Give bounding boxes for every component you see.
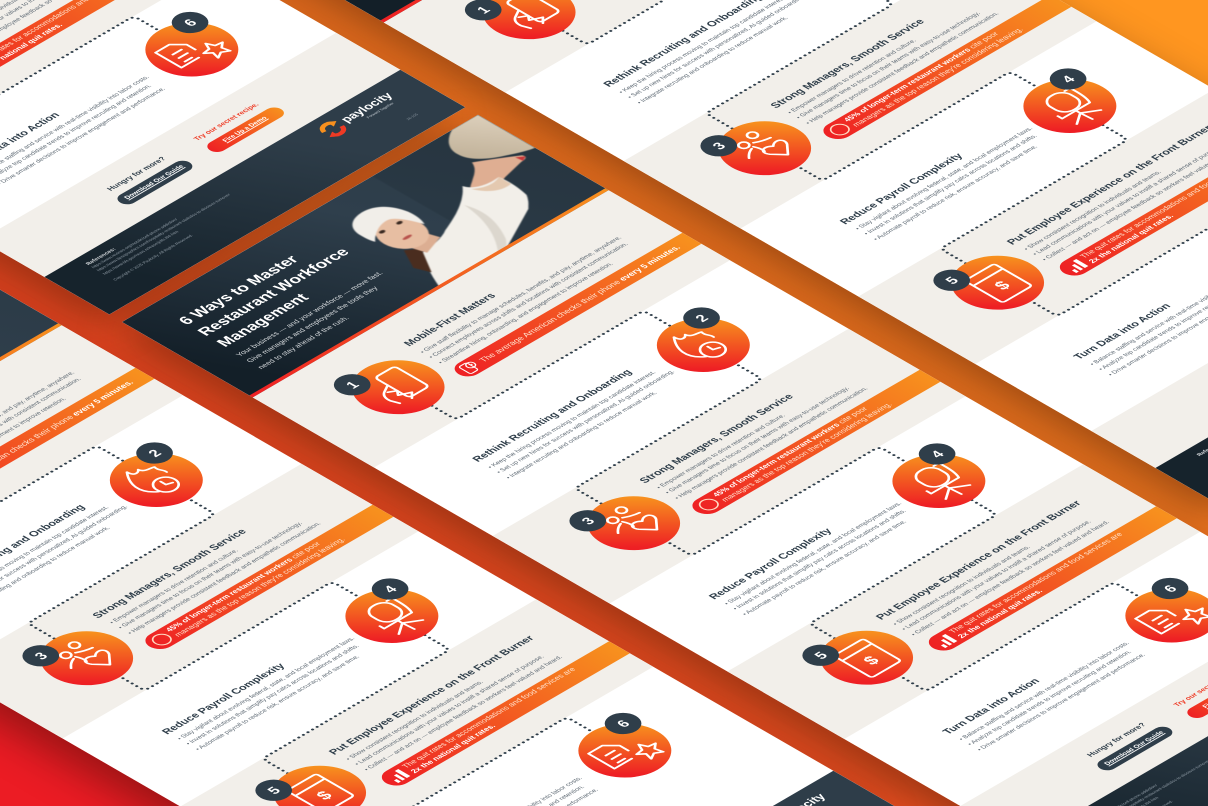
bullets: • Lead communications with your values to instill a shared sense of purpose. <box>354 655 546 767</box>
references: Copyright © 2025 Paylocity. All Rights Reserved. <box>112 233 194 281</box>
footer <box>1024 636 1208 806</box>
references: https://www.reviews.org/mobile/cell-phone-addiction/ <box>90 218 179 269</box>
badge node 4 <box>873 443 1005 519</box>
callout <box>0 358 172 515</box>
heading: Mobile-First Matters <box>401 291 499 348</box>
section 5 <box>858 89 1208 364</box>
bullets: • Empower managers to drive retention and culture. <box>655 413 787 490</box>
heading: Reduce Payroll Complexity <box>706 527 835 601</box>
callout <box>0 0 214 88</box>
badge node 4: 4 <box>1058 73 1078 85</box>
bullets: • Empower managers to drive retention and culture. <box>786 38 918 115</box>
logo <box>320 121 346 138</box>
bullets: • Give managers time to focus on their teams with easy-to-use technology. <box>795 11 983 120</box>
tagline: Forward Together <box>366 102 395 119</box>
badge node 5: 5 <box>810 649 831 661</box>
bullets: • Stay vigilant about evolving federal, state, and local employment laws. <box>176 636 356 741</box>
badge node 3 <box>21 620 152 696</box>
badge node 2: 2 <box>691 312 712 324</box>
heading: Strong Managers, Smooth Service <box>90 527 249 620</box>
badge node 6: 6 <box>180 17 200 28</box>
callout: 2x the national quit rates. <box>1087 213 1176 265</box>
bullets: • Give staff flexibility to manage schedules, benefits, and pay, anytime, anywhere. <box>418 235 623 354</box>
bullets: • Invest in solutions that simplify pay calcs across locations and shifts. <box>863 134 1039 236</box>
callout <box>817 0 1089 143</box>
badge node 5: 5 <box>263 784 284 796</box>
bullets: • Invest in solutions that simplify pay calcs across locations and shifts. <box>185 644 361 746</box>
prompt: Try our secret recipe. <box>192 102 261 142</box>
badge node 5: $ <box>312 788 337 803</box>
bullets: • Analyze top candidate trends to improve recruiting and retention. <box>966 650 1134 747</box>
bullets: • Set up new hires for success with personalized, AI-guided onboarding. <box>495 369 677 475</box>
badge node 3 <box>699 110 830 186</box>
callout: 45% of longer-term restaurant workers cite poor <box>841 30 1000 123</box>
heading: Turn Data into Action <box>940 677 1043 736</box>
bullets: • Help managers provide consistent feedback and empathetic communication. <box>804 11 1001 126</box>
badge node 6 <box>1106 577 1208 654</box>
badge node 1: 1 <box>473 4 494 16</box>
section 6 <box>940 578 1208 752</box>
bullets: • Automate payroll to reduce risk, ensure accuracy, and save time. <box>741 519 909 617</box>
bullets: • Connect employees across shifts and locations with consistent communication. <box>428 242 630 360</box>
section 3 <box>493 329 966 604</box>
bullets: • Invest in solutions that simplify pay calcs across locations and shifts. <box>732 509 908 611</box>
callout <box>923 496 1194 654</box>
intro text: Your business — and your workforce — move fast. <box>234 270 385 358</box>
references: References: <box>85 247 118 266</box>
bullets: • Show consistent recognition to individuals and teams. <box>891 545 1032 626</box>
callout: managers as the top reason they're considering leaving. <box>172 536 347 638</box>
bullets: • Integrate recruiting and onboarding to reduce manual work. <box>505 390 659 480</box>
bullets: • Collect — and act on — employee feedback so workers feel valued and heard. <box>363 655 564 772</box>
bullets: • Stay vigilant about evolving federal, state, and local employment laws. <box>854 126 1034 231</box>
bullets: • Drive smarter decisions to improve engagement and performance. <box>976 652 1147 752</box>
button: guide <box>1093 724 1176 773</box>
title: Management <box>213 291 313 349</box>
bullets: • Integrate recruiting and onboarding to reduce manual work. <box>636 15 790 105</box>
button: guide: Download Our Guide <box>123 164 186 201</box>
callout: managers as the top reason they're considering leaving. <box>850 26 1025 128</box>
prompt: Hungry for more? <box>1085 721 1148 758</box>
heading: Reduce Payroll Complexity <box>159 662 288 736</box>
heading: Strong Managers, Smooth Service <box>637 392 796 485</box>
heading: Put Employee Experience on the Front Burner <box>326 634 537 757</box>
badge node 3: 3 <box>708 140 729 152</box>
callout: The quit rates for accommodations and food services are <box>947 531 1124 634</box>
badge node 5 <box>801 620 932 696</box>
section 5 <box>180 599 653 806</box>
section 5 <box>727 464 1200 739</box>
badge node 5: $ <box>990 278 1015 293</box>
bullets: • Help managers provide consistent feedback and empathetic communication. <box>673 386 870 501</box>
badge node 4: 4 <box>927 448 947 460</box>
sheet: centre copy <box>122 115 1208 806</box>
bullets: • Empower managers to drive retention and culture. <box>108 548 240 625</box>
button: demo <box>203 105 288 154</box>
header band <box>122 115 609 397</box>
callout: The quit rates for accommodations and food services are <box>400 666 577 769</box>
bullets: • Automate payroll to reduce risk, ensure accuracy, and save time. <box>872 144 1040 242</box>
sheet: left copy <box>0 250 898 806</box>
badge node 5 <box>932 245 1063 321</box>
footer <box>477 771 898 806</box>
references: https://www.bls.gov/news.release/jolts.t04.htm <box>101 230 179 275</box>
footer <box>1155 261 1208 506</box>
badge node 3: 3 <box>30 650 51 662</box>
accent strip <box>380 0 740 22</box>
bullets: • Give managers time to focus on their teams with easy-to-use technology. <box>664 386 852 495</box>
callout: The average American checks their phone every 5 minutes. <box>476 243 682 363</box>
section 4 <box>837 68 1116 242</box>
badge node 2: 2 <box>144 447 165 459</box>
header band <box>253 0 740 22</box>
callout <box>376 631 647 789</box>
button: demo <box>1183 671 1208 720</box>
bullets: • Show consistent recognition to individuals and teams. <box>1022 170 1163 251</box>
dotted connector <box>430 312 1138 691</box>
section 2 <box>470 307 750 480</box>
badge node 2 <box>769 0 900 8</box>
callout <box>1054 121 1208 279</box>
section 1 <box>384 0 861 92</box>
badge node 3: 3 <box>577 515 598 527</box>
badge node 4: 4 <box>380 583 400 595</box>
call to action <box>960 599 1208 806</box>
button: guide: Download Our Guide <box>1103 730 1166 767</box>
intro text: Give managers and employees the tools they <box>244 285 380 364</box>
title: 6 Ways to Master <box>175 253 302 327</box>
references: https://www.tipsographics.com/hospitality-restaurant-statistics-to-discover-turnover <box>96 193 232 272</box>
accent strip <box>0 323 62 532</box>
bullets: • Show consistent recognition to individuals and teams. <box>344 680 485 761</box>
dotted connector <box>0 446 592 806</box>
callout <box>449 223 719 380</box>
bullets: • Stay vigilant about evolving federal, state, and local employment laws. <box>723 501 903 606</box>
callout: 45% of longer-term restaurant workers cite poor <box>163 540 322 633</box>
section 5 <box>0 0 220 173</box>
footer <box>44 70 465 314</box>
badge node 6 <box>559 712 691 789</box>
call to action <box>0 33 400 277</box>
section 4 <box>706 443 986 617</box>
section 6 <box>410 712 672 806</box>
section 4 <box>159 578 438 752</box>
accent strip <box>249 188 609 398</box>
bullets: • Give managers time to focus on their teams with easy-to-use technology. <box>117 521 305 630</box>
badge node 6: 6 <box>1160 583 1180 594</box>
section 1 <box>0 325 183 602</box>
badge node 1 <box>332 349 464 425</box>
bullets: • Help managers provide consistent feedback and empathetic communication. <box>126 521 323 636</box>
call to action <box>1091 224 1208 468</box>
section 2 <box>0 442 203 615</box>
wordmark: paylocity <box>337 90 396 125</box>
heading: Strong Managers, Smooth Service <box>768 17 927 110</box>
section 3 <box>624 0 1097 228</box>
badge node 1: 1 <box>342 379 363 391</box>
callout: managers as the top reason they're considering leaving. <box>719 401 894 503</box>
intro text: need to stay ahead of the rush. <box>255 315 351 370</box>
callout <box>686 360 958 518</box>
bullets: • Automate payroll to reduce risk, ensure accuracy, and save time. <box>194 654 362 752</box>
badge node 5: $ <box>859 653 884 668</box>
sheet: upper-left copy, lower half <box>0 0 465 314</box>
section 6 <box>1071 266 1208 377</box>
heading: Reduce Payroll Complexity <box>837 152 966 226</box>
button: demo: Fire Up a Demo <box>221 116 269 143</box>
bullets: • Drive smarter decisions to improve engagement and performance. <box>0 86 167 186</box>
section 6 <box>0 12 238 186</box>
badge node 6 <box>126 11 258 88</box>
title: Restaurant Workforce <box>194 246 353 338</box>
section 3 <box>0 464 419 738</box>
badge node 4 <box>1004 68 1136 144</box>
bullets: • Keep the hiring process moving to maintain top candidate interest. <box>486 370 657 470</box>
bullets: • Collect — and act on — employee feedback so workers feel valued and heard. <box>910 520 1111 637</box>
badge node 1 <box>463 0 595 50</box>
badge node 6: 6 <box>613 718 633 729</box>
prompt: Hungry for more? <box>105 155 168 192</box>
chef photo illustration <box>351 115 536 286</box>
callout <box>139 495 411 653</box>
header band <box>0 250 62 532</box>
dotted connector <box>562 0 1208 316</box>
heading: Turn Data into Action <box>1071 302 1174 361</box>
section 2 <box>601 0 808 105</box>
heading: Put Employee Experience on the Front Burner <box>873 499 1084 622</box>
section 1 <box>253 190 730 468</box>
doc id: 16-105 <box>406 113 419 121</box>
bullets: • Streamline hiring, onboarding, and engagement to improve retention. <box>437 261 615 365</box>
badge node 5 <box>254 755 385 806</box>
bullets: • Lead communications with your values to instill a shared sense of purpose. <box>901 520 1093 632</box>
callout: 2x the national quit rates. <box>956 588 1045 640</box>
badge node 2 <box>91 442 222 518</box>
badge node 5: 5 <box>941 274 962 286</box>
badge node 2 <box>638 307 769 383</box>
badge node 3 <box>568 485 699 561</box>
callout: 45% of longer-term restaurant workers cite poor <box>710 405 869 498</box>
sheet: right copy <box>253 0 1208 505</box>
dotted connector <box>0 16 158 96</box>
callout: 2x the national quit rates. <box>409 723 498 775</box>
button: guide <box>113 158 196 207</box>
bullets: • Balance staffing and service with real-time visibility into labor costs. <box>957 641 1131 742</box>
badge node 4 <box>326 578 458 654</box>
heading: Rethink Recruiting and Onboarding <box>470 368 635 464</box>
